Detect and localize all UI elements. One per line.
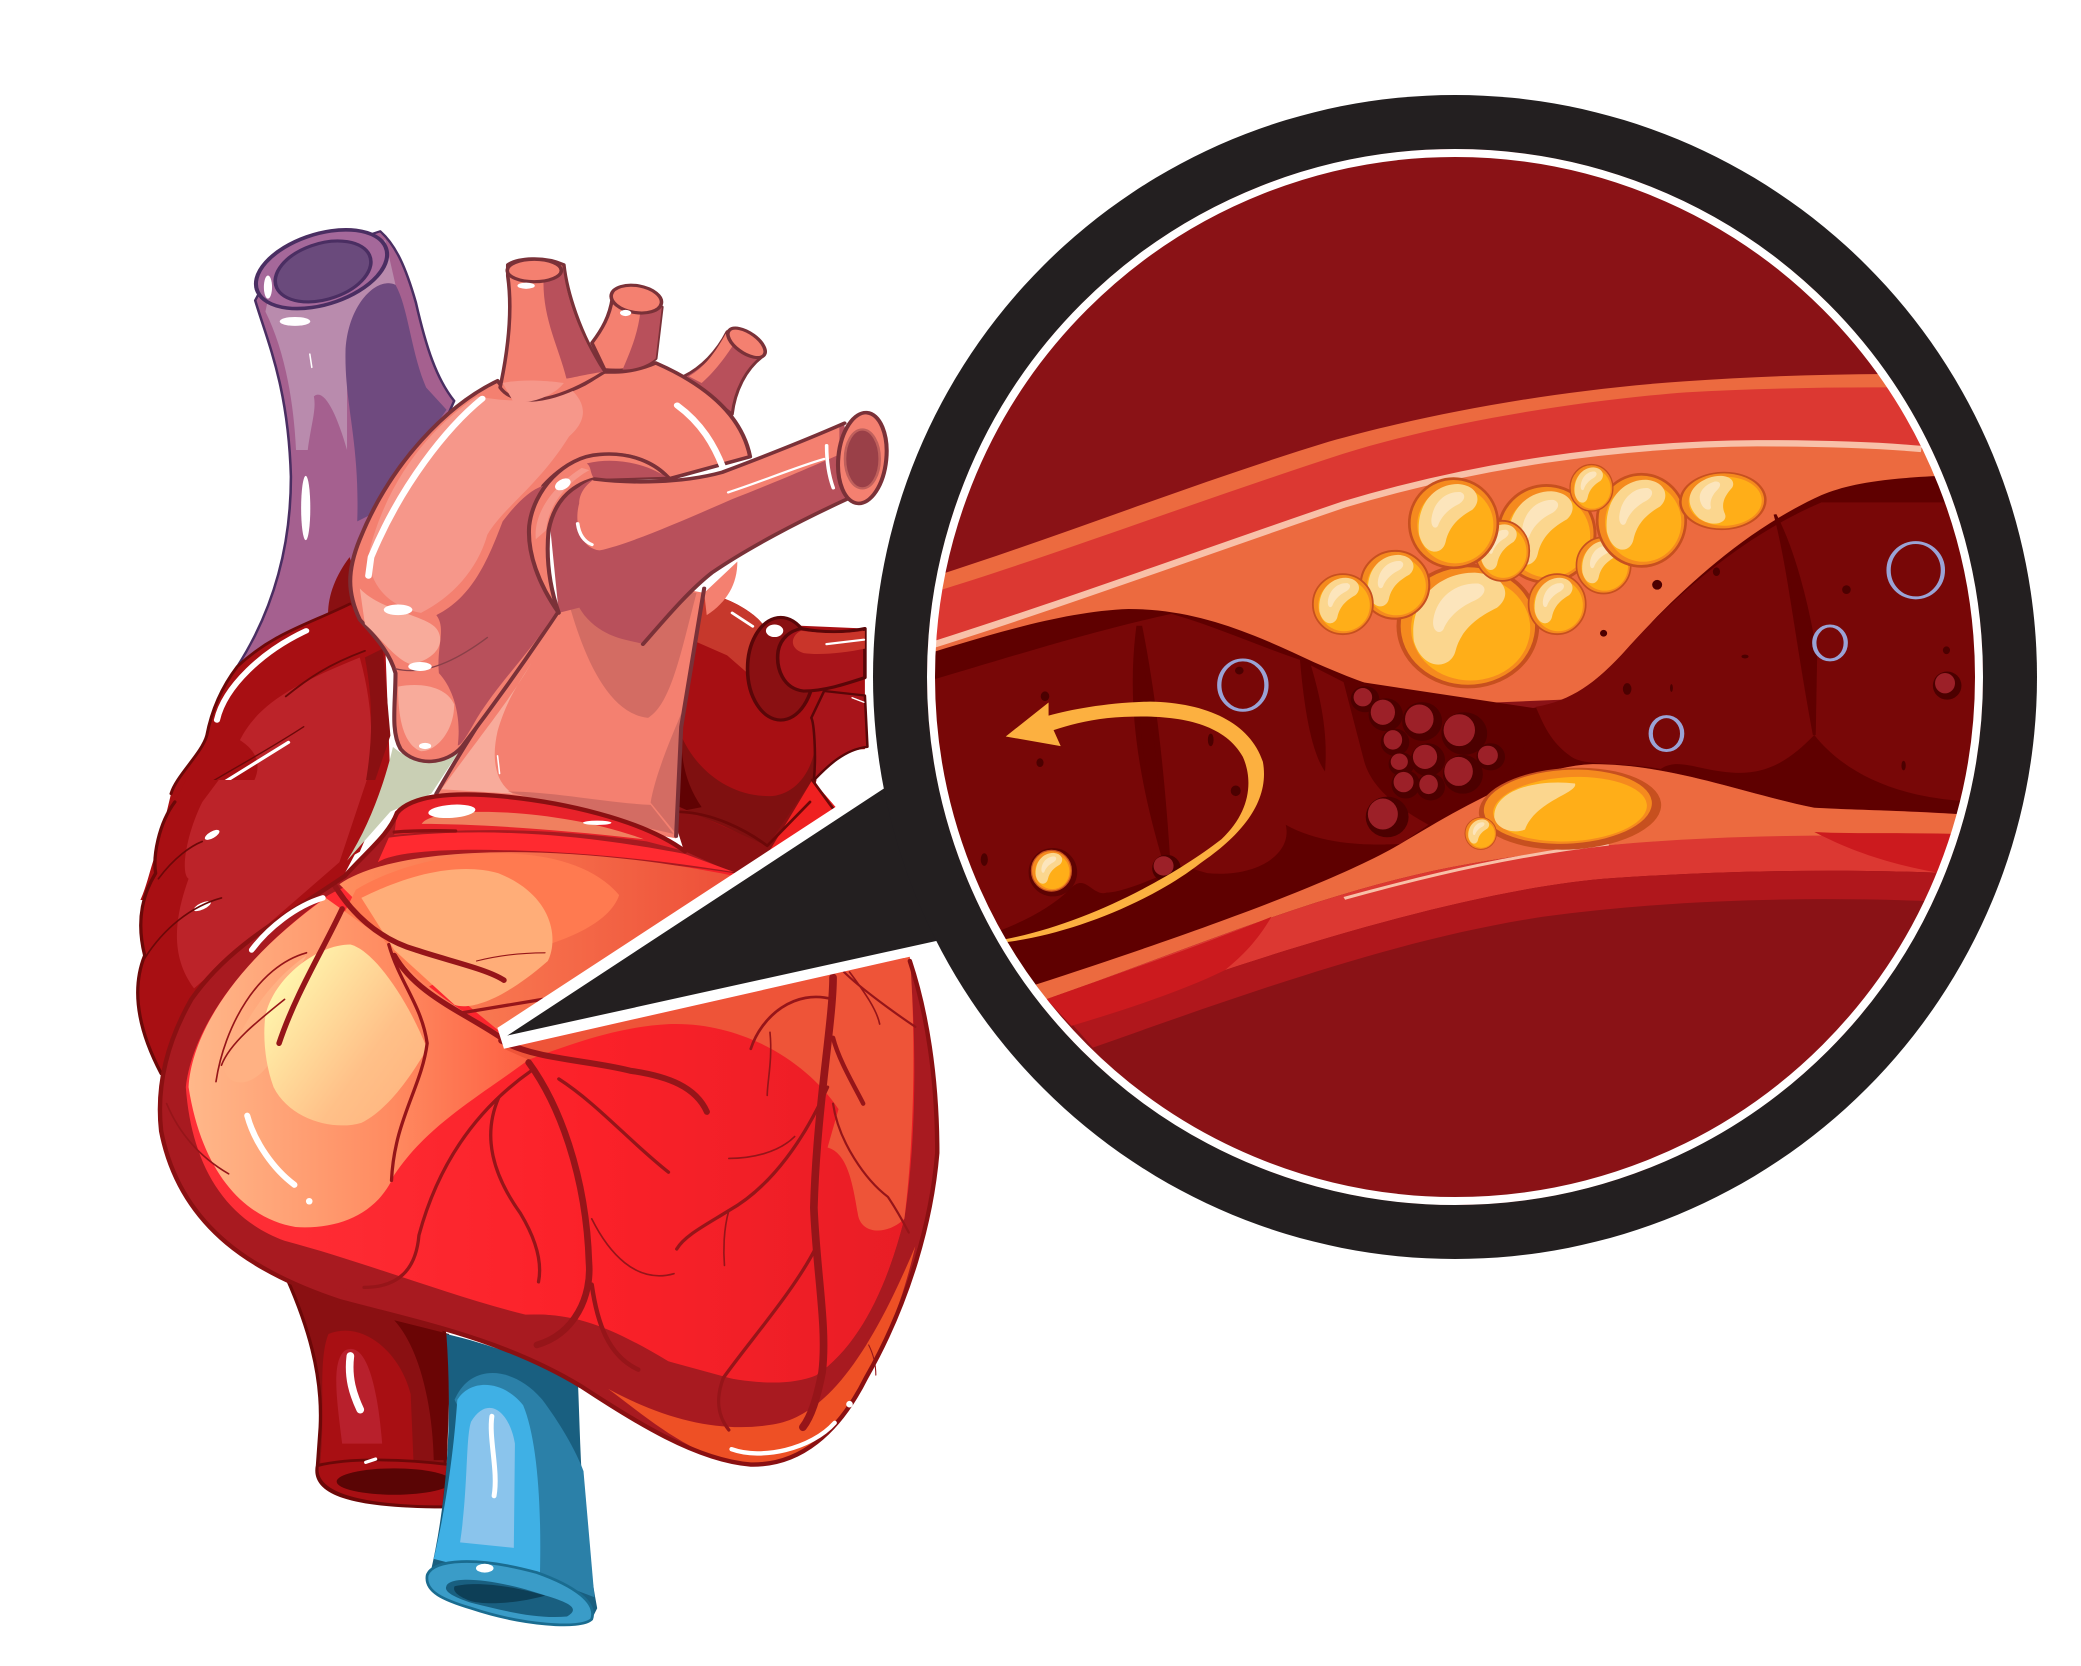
vessel: blue lower vein: [427, 1334, 597, 1625]
vessel: dark red lower vein: [287, 1279, 452, 1507]
fat cell in bloodstream: [1029, 848, 1077, 896]
middle branch: [592, 281, 664, 370]
chamber: back right atrium and vessels: [679, 593, 867, 847]
heart: [138, 214, 937, 1625]
magnifier lens: [873, 95, 2037, 1259]
lower artery wall: [1036, 764, 2043, 1048]
ventricle highlights: [247, 898, 853, 1453]
upper artery wall: [936, 374, 1934, 702]
lens background: [927, 149, 1983, 1205]
plaque: lower fat deposit: [1464, 768, 1662, 850]
flow arrow: [1006, 702, 1264, 942]
lens pointer: [497, 776, 959, 1049]
vessel: pulmonary artery: [529, 411, 891, 644]
artery cross-section: [935, 374, 1975, 1048]
blood clot cells: [1152, 672, 1961, 882]
right orange area: [504, 957, 913, 1231]
plaque: upper fat deposits: [1313, 462, 1781, 687]
chamber: right atrium upper lobe: [140, 557, 390, 900]
ventricle outline: [160, 813, 937, 1465]
lower rim: [339, 1153, 932, 1465]
lens white ring: [931, 153, 1979, 1201]
lumen: [935, 476, 1975, 986]
bubbles: [1219, 543, 1943, 751]
chamber: right atrium lower lobe: [138, 780, 394, 1073]
large branch: [500, 259, 605, 402]
vessel: purple vena cava: [237, 214, 454, 666]
left bright lobe: [189, 898, 529, 1227]
coronary arteries: [167, 884, 915, 1430]
vessel: small arch branch: [684, 323, 771, 414]
chamber: ventricles: [160, 794, 937, 1465]
tissue between atrium and ventricle: [669, 780, 836, 880]
lens frame: [873, 95, 2037, 1259]
small dark specks: [981, 567, 1950, 866]
aorta and arch branches: [350, 259, 750, 761]
aorta body: [350, 363, 750, 761]
vessel: pulmonary trunk: [347, 562, 737, 861]
upper band: [339, 794, 734, 1035]
